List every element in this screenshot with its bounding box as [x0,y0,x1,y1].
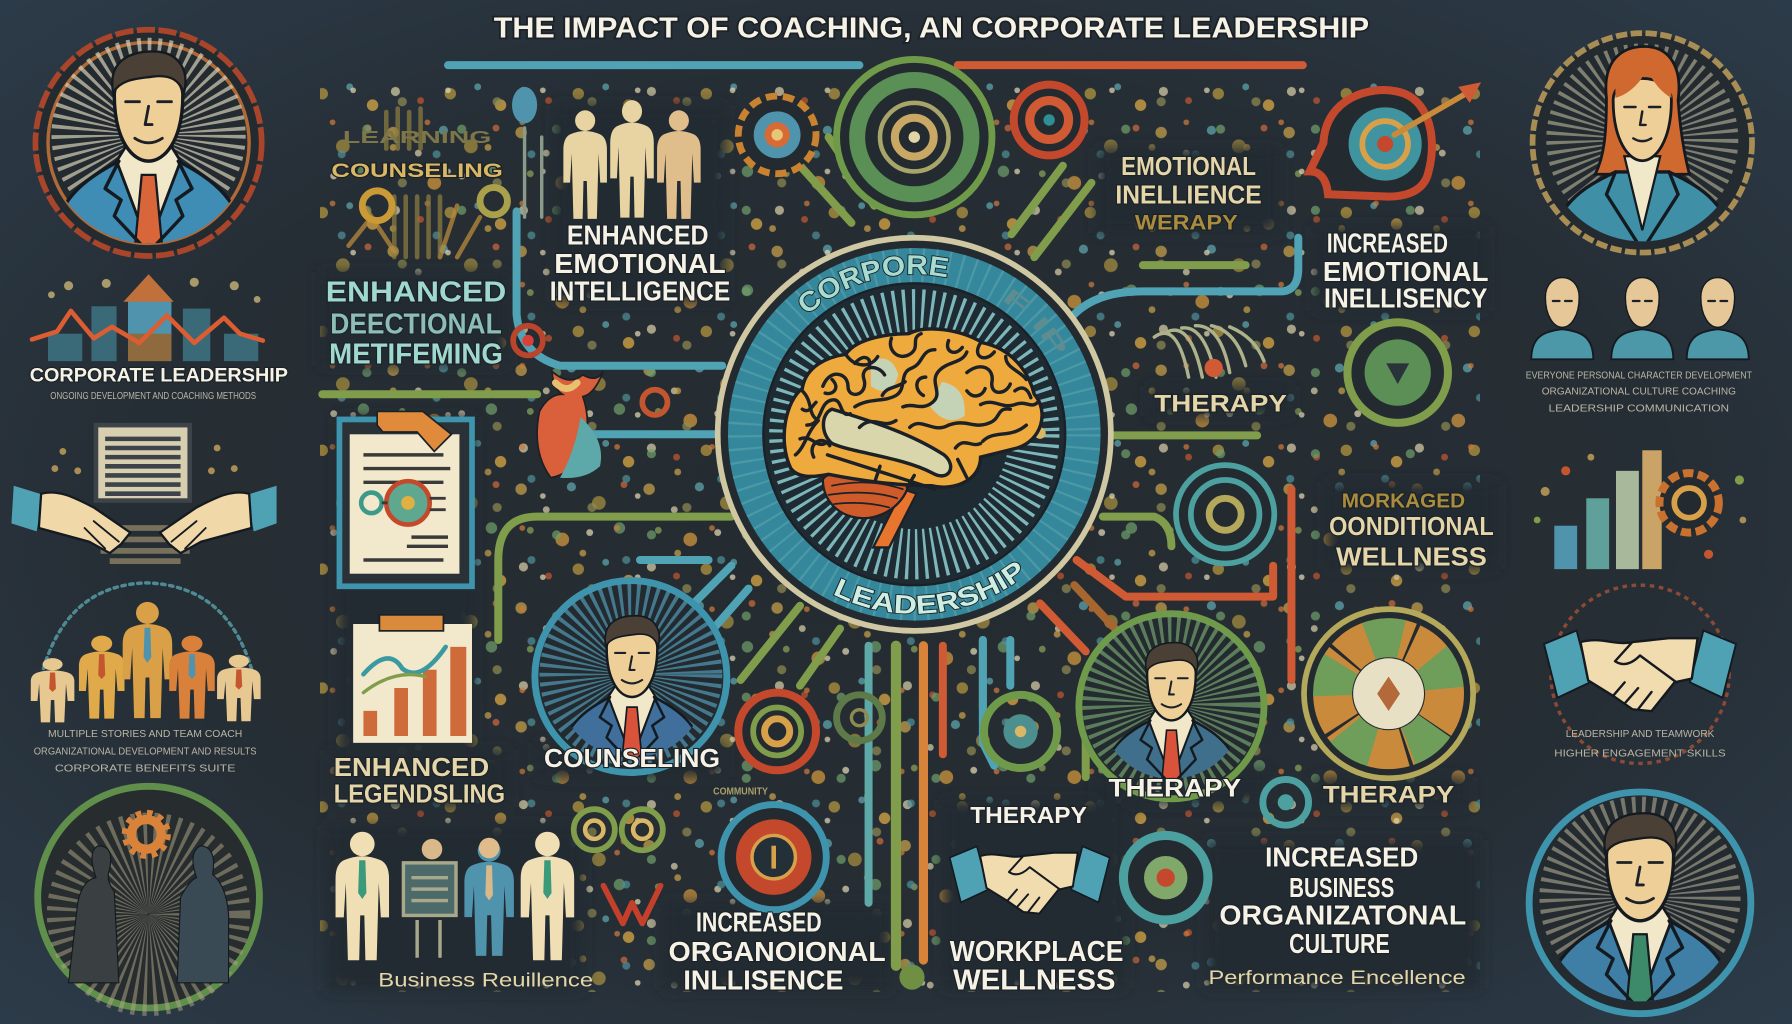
text: emotional intelligence therapy [1115,151,1262,235]
text: enhanced directional mentoring: ENHANCED [326,277,506,309]
icon: red-orange heart [537,371,603,478]
small caption block: LEADERSHIP COMMUNICATION [1549,403,1729,414]
label: business resilience: Business Reuillence [378,969,593,991]
icon: segmented wheel [1304,609,1473,778]
icon: red target lower [738,693,816,770]
icon: meeting people [336,832,574,960]
small caption block: ORGANIZATIONAL DEVELOPMENT AND RESULTS [34,746,257,757]
portrait: man with green tie [1529,792,1751,1015]
label: therapy middle: THERAPY [1109,775,1241,803]
text: organizational wellness: MORKAGED [1342,489,1465,512]
icon: red target [1014,85,1085,155]
text: increased organizational influence: ORGANOIONAL [669,936,886,967]
icon: document with handshake [11,425,277,561]
text: increased organizational influence [669,906,886,996]
icon: head with target and arrow [1310,82,1481,197]
portrait: two silhouettes with gear [38,786,259,1008]
icon: therapy swirl [1154,326,1264,377]
text: enhanced emotional intelligence: ENHANCED [567,220,709,251]
text: enhanced emotional intelligence [550,220,730,307]
text: enhanced legendsling: LEGENDSLING [334,778,505,808]
text: increased business organizational culture: BUSINESS [1289,872,1394,903]
portrait: therapy man [1079,614,1264,799]
icon: green small target [984,695,1057,768]
text: workplace wellness [950,936,1123,997]
small caption block: CORPORATE BENEFITS SUITE [55,763,236,774]
icon: handshake in ring [1544,585,1736,763]
icon: teal and red target [721,805,826,910]
text: increased emotional intelligence: INELLISENCY [1324,282,1487,313]
text: enhanced directional mentoring: DEECTIONAL [330,309,502,341]
portrait: counseling man [535,581,727,773]
label: performance excellence: Performance Encellence [1209,967,1466,989]
icons: paired green badges [574,809,663,850]
small caption: ONGOING DEVELOPMENT AND COACHING METHODS [50,391,256,402]
label: counseling: COUNSELING [544,743,720,773]
icon: rising bar chart clipboard [353,615,472,743]
title: THE IMPACT OF COACHING, AN CORPORATE LEADERSHIP [494,13,1369,45]
small caption block: HIGHER ENGAGEMENT SKILLS [1554,749,1726,760]
text: increased business organizational culture: INCREASED [1265,841,1418,872]
text: emotional intelligence therapy: INELLIENCE [1115,179,1262,209]
curved label: leadership: LEADERSHIP [832,562,1021,615]
icon: small teal target [1263,779,1309,825]
text: increased business organizational culture: CULTURE [1289,928,1390,959]
text: workplace wellness: WORKPLACE [950,936,1123,968]
bar chart with swirl [1534,450,1746,569]
small caption block: LEADERSHIP AND TEAMWORK [1566,729,1714,740]
text: increased emotional intelligence: EMOTIONAL [1323,256,1489,287]
icon: vertical line end cap [899,965,925,990]
label: counseling: COUNSELING [331,160,503,182]
icon: gear emblem [738,96,816,174]
text: enhanced legendsling: ENHANCED [334,752,489,782]
text: enhanced directional mentoring [326,277,506,370]
text: enhanced emotional intelligence: INTELLIGENCE [550,276,730,307]
icon: brain [784,329,1042,547]
text: increased organizational influence: INLLISENCE [683,965,843,996]
text: enhanced directional mentoring: METIFEMING [329,338,503,370]
text: organizational wellness: OONDITIONAL [1329,511,1494,541]
text: enhanced legendsling [334,752,505,808]
three bald figures [1531,278,1749,359]
icon: green target right [1347,322,1448,423]
icon: teal target right [1176,465,1274,563]
icon: teal target bottom [1123,835,1208,920]
panel: left column [11,30,288,1008]
icon: faint green target [837,695,882,741]
small caption block [1526,370,1753,414]
text: workplace wellness: WELLNESS [953,965,1115,997]
central badge [714,234,1114,634]
icon: large green target [837,59,992,215]
connector lines [322,65,1303,966]
small caption block: MULTIPLE STORIES AND TEAM COACH [48,729,242,740]
icon: three people [563,100,701,219]
skyline chart with zigzag line [32,274,263,361]
curved label: corpore: CORPORE [798,254,950,312]
icon: handshake centre [950,846,1110,914]
text: increased emotional intelligence [1323,228,1489,313]
panel: counseling tangle: LEARNING [343,127,491,147]
text: organizational wellness: WELLNESS [1336,542,1487,572]
small caption block: ORGANIZATIONAL CULTURE COACHING [1542,386,1736,397]
icon: red W mark [603,886,661,923]
text: increased business organizational culture: ORGANIZATONAL [1219,900,1466,931]
label: therapy right: THERAPY [1323,781,1454,808]
people group under arch [31,583,261,722]
small caption block [34,729,257,774]
label: corporate leadership: CORPORATE LEADERSHIP [30,365,288,387]
label: therapy lower: THERAPY [970,802,1087,828]
text: increased emotional intelligence: INCREASED [1327,228,1448,259]
small caption block [1554,729,1726,760]
icon: document in blue frame [339,411,472,586]
text: increased organizational influence: INCREASED [696,906,822,937]
panel: dotted texture field [320,78,1497,992]
portrait: woman [1533,33,1752,255]
curved label: faint fragment: F IP [1004,288,1065,351]
text: emotional intelligence therapy: EMOTIONAL [1121,151,1256,181]
small target near heart [513,326,667,415]
panel: right column [1526,33,1753,1015]
text: emotional intelligence therapy: WERAPY [1135,210,1238,235]
text: increased business organizational culture [1219,841,1466,959]
portrait: man with red tie [35,30,262,257]
label: therapy: THERAPY [1154,390,1287,417]
panel: counseling tangle [331,87,542,257]
text: enhanced emotional intelligence: EMOTIONAL [554,248,726,279]
small caption: community: COMMUNITY [713,786,768,797]
small caption block: EVERYONE PERSONAL CHARACTER DEVELOPMENT [1526,370,1753,381]
text: organizational wellness [1329,489,1494,572]
